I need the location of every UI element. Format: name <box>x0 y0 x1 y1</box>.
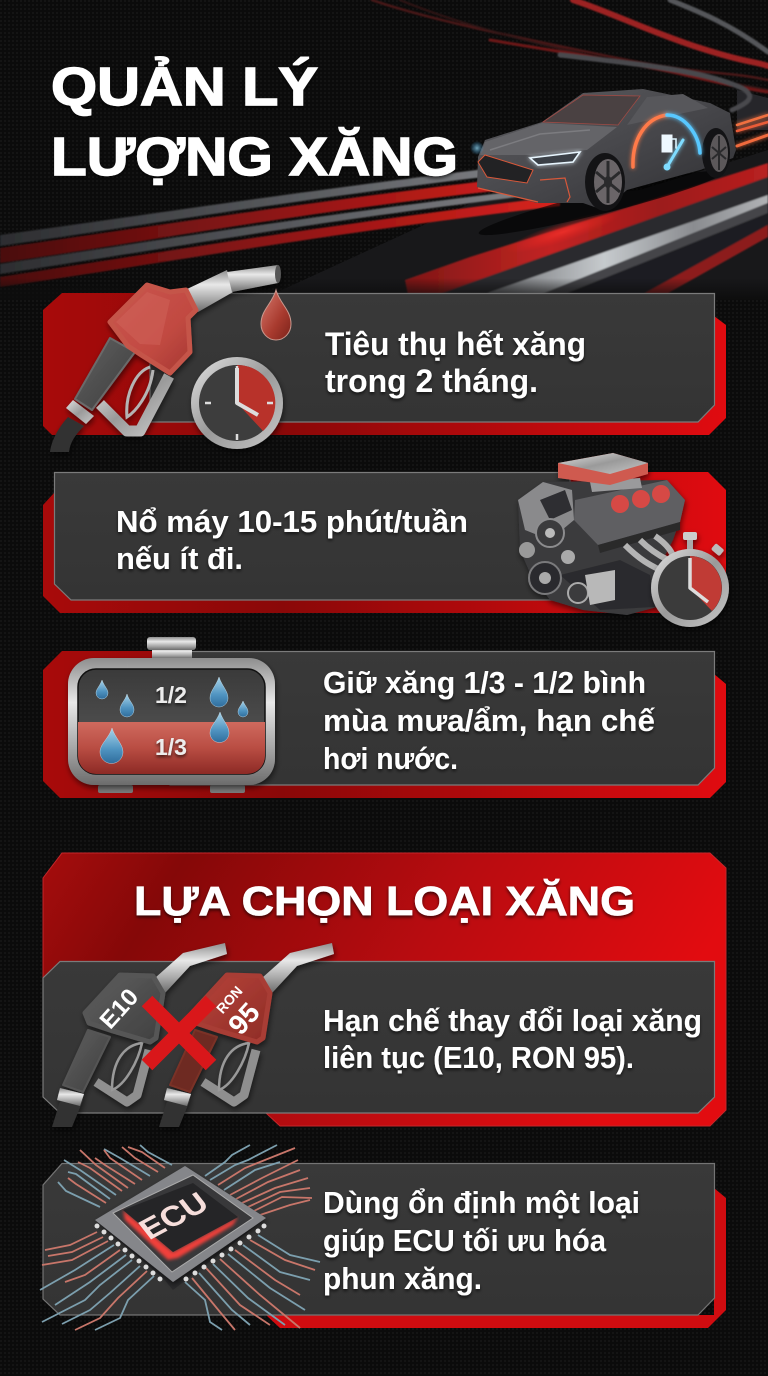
title: QUẢN LÝ <box>51 57 318 117</box>
section heading: LỰA CHỌN LOẠI XĂNG <box>134 878 635 924</box>
panel: choosing fuel type <box>43 853 726 1127</box>
text: Hạn chế thay đổi loại xăng <box>323 1003 702 1038</box>
icon: E10 nozzle: E10 <box>95 984 144 1034</box>
text: Giữ xăng 1/3 - 1/2 bình <box>323 665 646 700</box>
fuel gauge <box>633 115 700 170</box>
text: Dùng ổn định một loại <box>323 1185 640 1220</box>
tank labels: 1/2 <box>155 682 187 708</box>
chip pins <box>94 1224 266 1282</box>
water drops <box>96 677 248 764</box>
icon: RON 95 nozzle <box>159 943 334 1127</box>
icon: clock <box>191 357 283 449</box>
text: mùa mưa/ẩm, hạn chế <box>323 703 656 738</box>
rear wheel <box>702 128 730 178</box>
panel: keep fuel level <box>43 637 726 798</box>
tank labels <box>155 682 187 760</box>
icon: fuel drop <box>261 290 291 340</box>
grille <box>478 155 533 183</box>
icon: ECU chip: ECU <box>133 1187 215 1246</box>
text <box>325 326 586 399</box>
icon: RON 95 nozzle: 95 <box>222 997 266 1041</box>
icon: engine <box>518 453 685 615</box>
icon: stopwatch <box>651 532 729 627</box>
text: liên tục (E10, RON 95). <box>323 1040 634 1075</box>
panel: run engine weekly <box>43 453 729 627</box>
text: nếu ít đi. <box>116 541 243 576</box>
title: LƯỢNG XĂNG <box>51 127 458 187</box>
icon: fuel tank <box>68 637 275 793</box>
text <box>323 1185 640 1296</box>
icon: RON 95 nozzle: RON <box>213 983 246 1017</box>
panel: stable fuel for ECU <box>40 1145 726 1330</box>
text <box>323 1003 702 1075</box>
icon: E10 nozzle <box>52 943 227 1127</box>
text: Tiêu thụ hết xăng <box>325 326 586 362</box>
text: Nổ máy 10-15 phút/tuần <box>116 504 468 539</box>
front wheel <box>585 153 625 211</box>
icon: red cross <box>147 1001 211 1065</box>
icon: fuel nozzle <box>50 265 281 452</box>
text: hơi nước. <box>323 741 458 776</box>
icon: ECU chip <box>94 1166 266 1290</box>
text <box>116 504 468 576</box>
windshield <box>543 95 640 125</box>
hood <box>480 123 617 155</box>
text: phun xăng. <box>323 1261 482 1296</box>
hero: road light streaks <box>0 0 768 305</box>
icon: ECU circuit traces <box>40 1145 320 1330</box>
car with glowing fuel gauge <box>470 89 736 244</box>
headlight <box>530 152 580 165</box>
text <box>323 665 656 776</box>
text: trong 2 tháng. <box>325 363 538 399</box>
text: giúp ECU tối ưu hóa <box>323 1223 607 1258</box>
panel: avoid switching <box>43 962 714 1113</box>
tank labels: 1/3 <box>155 734 187 760</box>
panel: consume within 2 months <box>43 265 726 452</box>
side window <box>627 94 708 125</box>
title <box>51 57 458 187</box>
